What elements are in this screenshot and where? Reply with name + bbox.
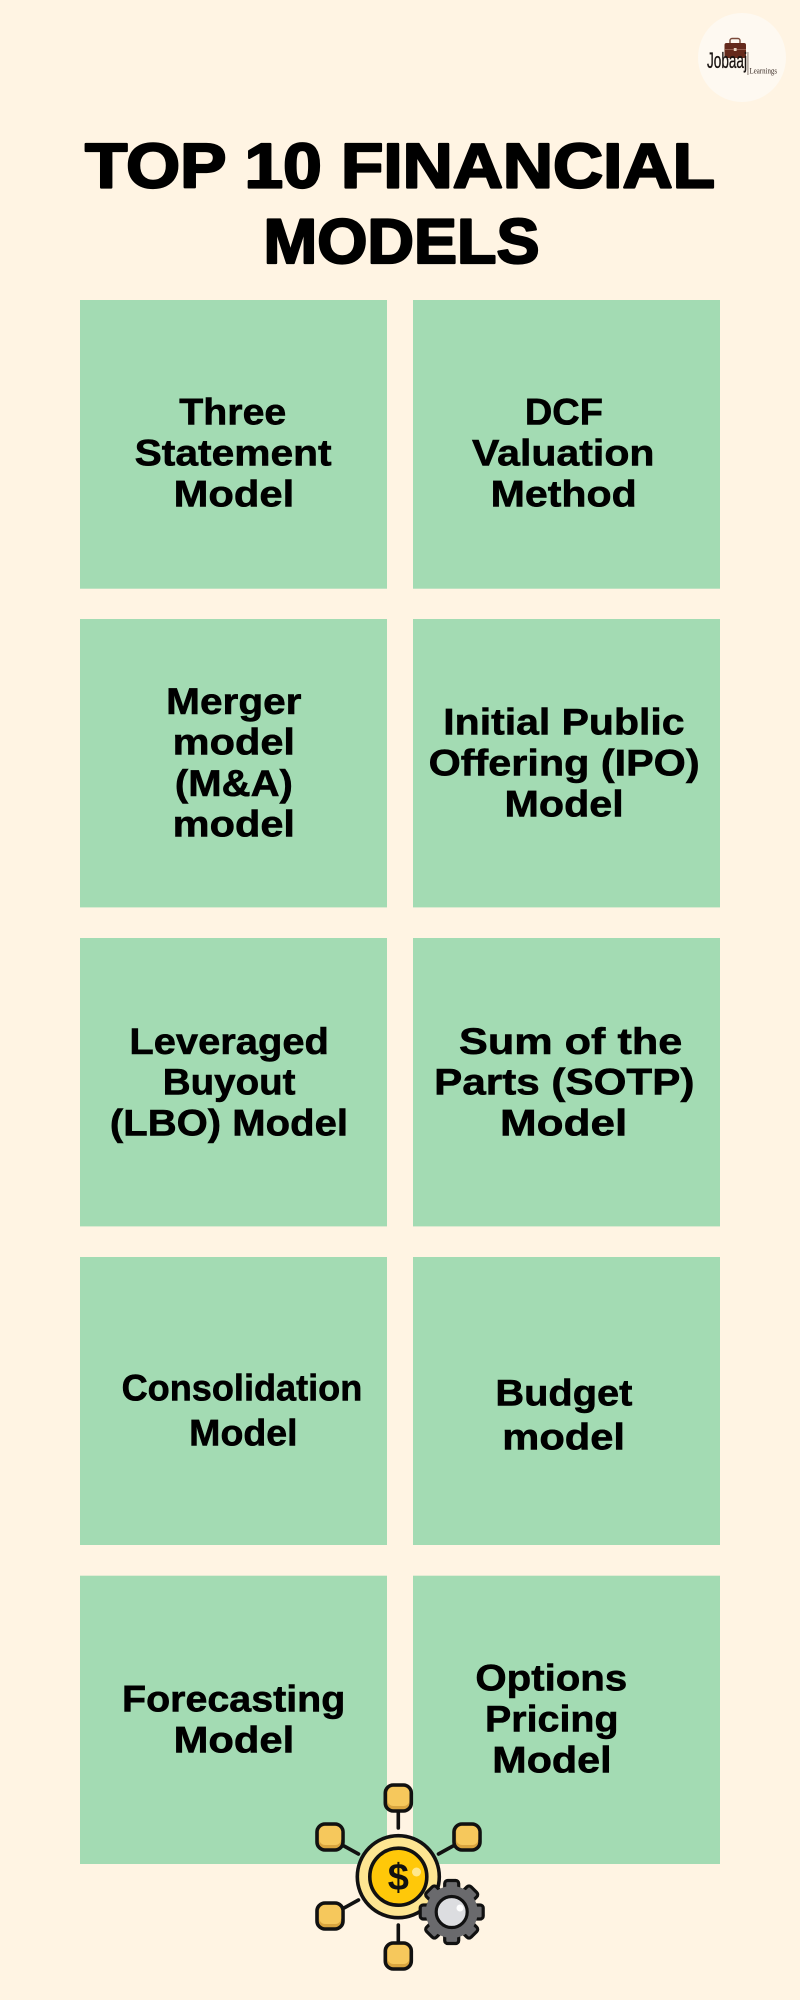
panel label: Merger [166,681,302,722]
panel: Forecasting Model [80,1576,387,1864]
panel: DCF Valuation Method [413,300,720,589]
panel label: DCF [525,392,603,433]
panel: Three Statement Model [80,300,387,589]
connector lines [344,1812,453,1941]
panel label [135,392,332,515]
logo: Jobaaj Learnings [698,13,786,102]
coin: $ [388,1857,409,1899]
panel label: Forecasting [122,1679,345,1720]
title [85,132,715,277]
panel label: Options [475,1658,627,1699]
panel label: model [173,804,295,845]
node squares [317,1785,480,1969]
panel label: Pricing [485,1699,618,1740]
panel label: model [173,722,295,763]
panel label: Valuation [472,433,654,474]
title: MODELS [264,207,540,277]
panel label: Method [491,474,637,515]
panel label [122,1368,362,1453]
panel label: Model [174,1720,294,1761]
coin [357,1836,439,1918]
panel: Sum of the Parts (SOTP) Model [413,938,720,1226]
panel label: model [502,1416,625,1457]
panel label [110,1021,348,1144]
panel label: Initial Public [443,702,684,743]
gear [420,1880,483,1944]
node highlights [319,1787,478,1964]
panel: Merger model (M&A) model [80,619,387,907]
panel label: Leveraged [129,1021,329,1062]
panel label: Model [189,1412,298,1453]
panel label: Three [179,392,286,433]
panel: Consolidation Model [80,1257,387,1545]
panel label: Consolidation [122,1368,362,1409]
panel: Initial Public Offering (IPO) Model [413,619,720,907]
panel label [429,702,700,825]
logo tagline: Learnings [750,66,777,76]
panel label [472,392,654,515]
icon: money network with coin and gear [317,1785,483,1969]
panel label: Offering (IPO) [429,743,700,784]
panel label: Model [500,1103,627,1144]
panel label: Parts (SOTP) [434,1062,694,1103]
panel label: Buyout [163,1062,296,1103]
panel label [495,1372,632,1457]
title: TOP 10 FINANCIAL [85,132,715,202]
logo wordmark: Jobaaj [707,48,747,73]
panel label: (LBO) Model [110,1103,348,1144]
panel label: Model [504,784,624,825]
panel label [166,681,302,845]
panel label: Sum of the [459,1021,682,1062]
panel label: (M&A) [175,763,293,804]
panel label: Statement [135,433,332,474]
panel label: Model [492,1739,612,1780]
icon: briefcase [724,38,746,58]
panel: Options Pricing Model [413,1576,720,1864]
panel label [434,1021,694,1144]
panel label [122,1679,345,1761]
panel: Budget model [413,1257,720,1545]
panel label [475,1658,627,1780]
panel: Leveraged Buyout (LBO) Model [80,938,387,1226]
panel label: Budget [495,1372,632,1413]
panel label: Model [174,474,294,515]
